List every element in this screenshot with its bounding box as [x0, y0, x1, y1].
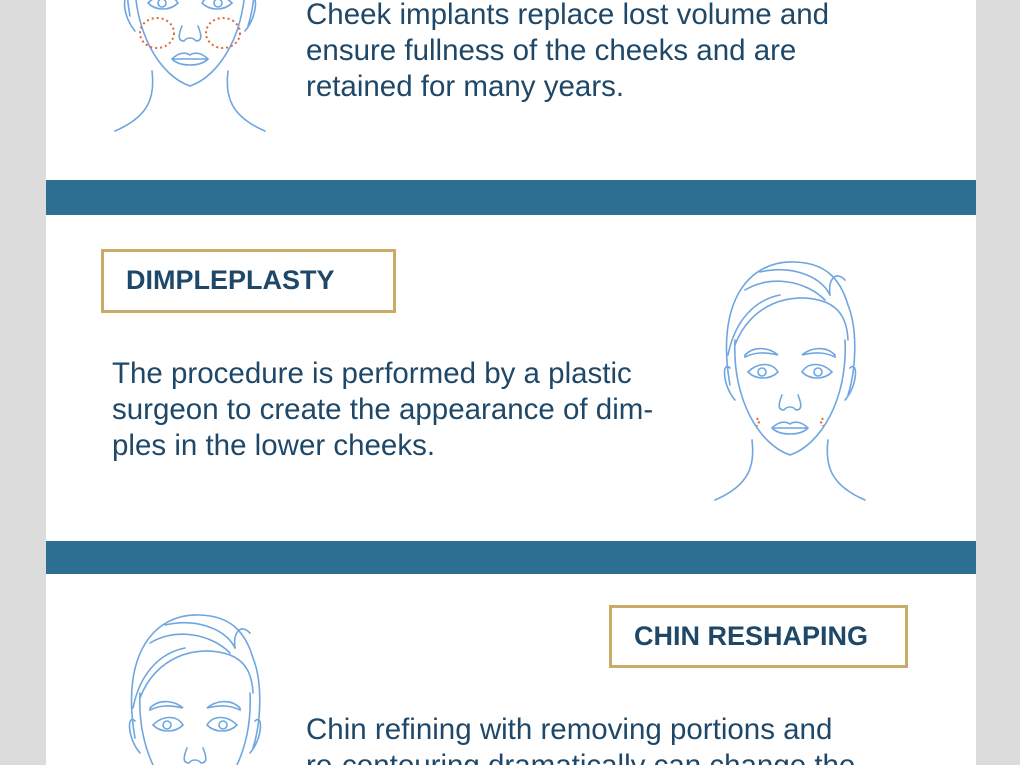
- heading: dimpleplasty: DIMPLEPLASTY: [126, 265, 335, 295]
- heading: chin reshaping: [609, 605, 908, 668]
- face: cheek implants: [115, 0, 265, 131]
- text: dimpleplasty: The procedure is performed by a plastic: [112, 357, 632, 390]
- text: chin reshaping: Chin refining with removing portions and: [306, 713, 832, 746]
- heading: dimpleplasty: [101, 249, 396, 313]
- text: dimpleplasty: surgeon to create the appearance of dim-: [112, 393, 653, 426]
- text: cheek implants: ensure fullness of the cheeks and are: [306, 34, 796, 67]
- text: dimpleplasty: [112, 357, 653, 462]
- text: dimpleplasty: ples in the lower cheeks.: [112, 429, 435, 462]
- text: cheek implants: retained for many years.: [306, 70, 624, 103]
- text: chin reshaping: [306, 713, 855, 765]
- face: dimpleplasty: [715, 262, 865, 500]
- face: chin reshaping: [120, 615, 270, 765]
- heading: chin reshaping: CHIN RESHAPING: [634, 621, 868, 651]
- text: cheek implants: [306, 0, 829, 103]
